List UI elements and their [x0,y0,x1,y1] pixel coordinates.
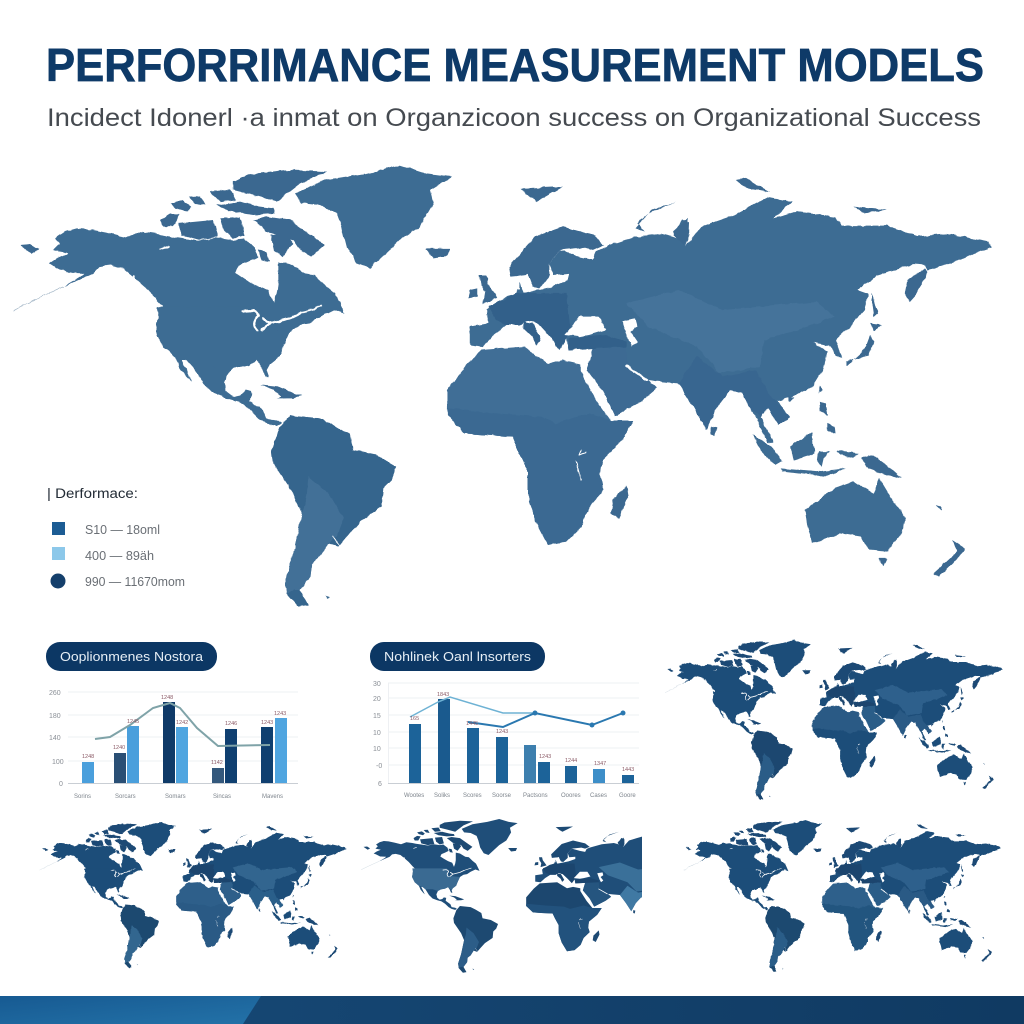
value labels: 1246 [225,721,237,727]
category labels: Sincas [213,794,231,800]
light trend line [410,697,535,717]
y axis labels: 0 [59,781,63,788]
value labels: 1242 [176,720,188,726]
dark trend line [468,710,626,728]
bars [82,702,287,783]
category labels: Wootes [404,793,424,799]
small world map: bottom left [40,822,347,968]
category labels: Soliks [434,793,450,799]
y axis labels: 260 [49,690,61,697]
category labels: Soorse [492,793,512,799]
y axis labels: 180 [49,713,61,720]
eastern hemisphere: Europe, Africa, Asia and Oceania [447,178,992,577]
category labels: Somars [165,794,186,800]
bars [409,699,634,783]
subtitle: Incidect Idonerl ·a inmat on Organzicoon success on Organizational Success [47,104,981,132]
trend line [95,703,270,746]
category labels: Cases [590,793,607,799]
y axis labels: -0 [376,763,382,770]
y axis labels: 15 [373,713,381,720]
legend label 2: 400 — 89äh [85,549,154,563]
y axis labels: 10 [373,730,381,737]
legend label 3: 990 — 11670mom [85,575,185,589]
y axis labels: 30 [373,681,381,688]
y axis labels: 20 [373,696,381,703]
y axis labels: 10 [373,746,381,753]
value labels: 1244 [565,758,577,764]
value labels: 1445 [466,721,478,727]
chart heading pill: Ooplionmenes Nostora [60,649,204,664]
small world map: bottom right [684,820,1001,972]
category labels: Ooores [561,793,581,799]
value labels: 1248 [82,754,94,760]
legend swatch: navy circle [50,574,66,588]
value labels: 1843 [437,692,449,698]
category labels: Goore [619,793,636,799]
value labels: 1245 [127,719,139,725]
category labels: Sorins [74,794,91,800]
category labels: Scores [463,793,482,799]
footer band [0,996,1024,1024]
chart heading pill [370,642,545,671]
value labels: 1347 [594,761,606,767]
panel: left bar chart [46,642,298,800]
main world map [13,165,992,607]
western hemisphere: Americas and Arctic [13,165,452,607]
value labels: 1240 [113,745,125,751]
small world map: bottom centre, clipped at right [361,819,642,973]
legend heading: | Derformace: [47,486,138,501]
legend swatch: light blue square [52,547,65,560]
small world map: top right [665,640,1003,800]
y axis labels [373,681,382,788]
y axis labels: 6 [378,781,382,788]
category labels: Mavens [262,794,283,800]
legend swatch: medium blue square [52,522,65,535]
chart heading pill [46,642,217,671]
value labels: 1243 [274,711,286,717]
value labels: 1243 [261,720,273,726]
category labels: Pactsons [523,793,548,799]
value labels: 1443 [622,767,634,773]
value labels: 165 [410,716,419,722]
value labels: 1243 [496,729,508,735]
value labels [82,695,286,766]
legend [47,486,185,589]
category labels: Sorcars [115,794,136,800]
y axis labels [49,690,64,788]
legend label 1: S10 — 18oml [85,523,160,537]
chart heading pill: Nohlinek Oanl lnsorters [384,649,532,664]
value labels: 1248 [161,695,173,701]
panel: right bar chart [370,642,639,799]
value labels: 1243 [539,754,551,760]
y axis labels: 140 [49,735,61,742]
category labels [74,794,283,800]
y axis labels: 100 [52,759,64,766]
value labels [410,692,634,773]
value labels: 1142 [211,760,223,766]
title: PERFORRIMANCE MEASUREMENT MODELS [46,39,984,91]
category labels [404,793,636,799]
